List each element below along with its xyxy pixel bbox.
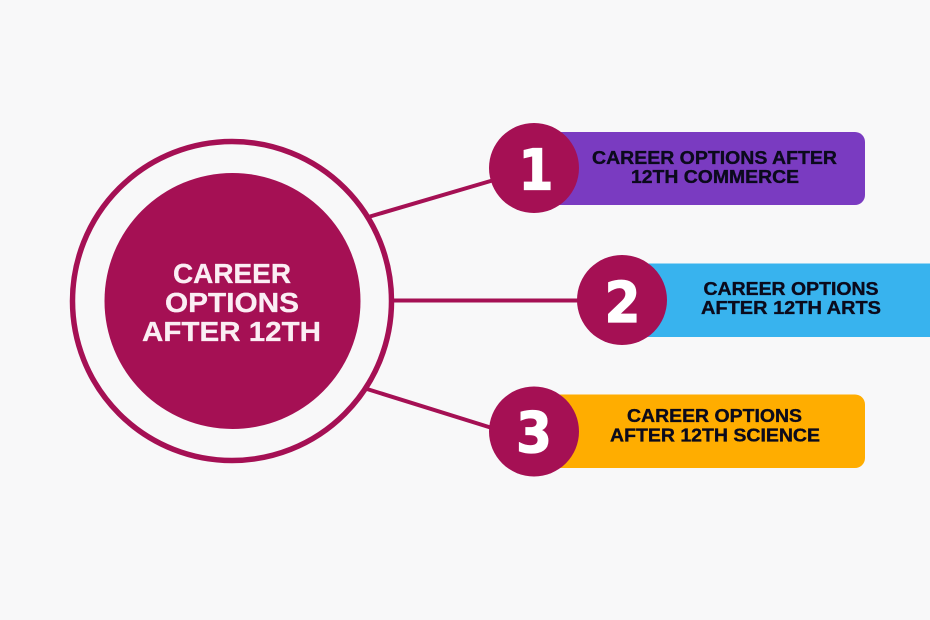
number badge 2: 2 [604, 271, 640, 336]
bar label: AFTER 12TH ARTS [701, 298, 881, 318]
option 3: science [489, 386, 865, 476]
central hub: career options after 12th [72, 142, 392, 460]
option 1: commerce [489, 123, 865, 213]
blue bar [630, 264, 930, 337]
bar label: CAREER OPTIONS [704, 279, 878, 299]
hub title: OPTIONS [165, 287, 299, 318]
number badge 3 [489, 386, 579, 476]
bar label [610, 406, 820, 446]
bar label [592, 148, 837, 187]
outer ring [72, 142, 392, 460]
bar label [701, 279, 881, 318]
bar label: 12TH COMMERCE [631, 167, 799, 187]
hub title: AFTER 12TH [142, 316, 321, 347]
connector lines [367, 180, 580, 428]
purple bar [540, 132, 865, 205]
number badge 1: 1 [518, 138, 554, 204]
amber bar [540, 394, 865, 468]
number badge 1 [489, 123, 579, 213]
number badge 3: 3 [516, 401, 552, 466]
number badge 2 [577, 255, 667, 345]
hub title [142, 258, 321, 347]
bar label: CAREER OPTIONS AFTER [592, 148, 837, 168]
bar label: CAREER OPTIONS [627, 406, 802, 426]
bar label: AFTER 12TH SCIENCE [610, 426, 820, 446]
hub title: CAREER [173, 258, 291, 289]
option 2: arts [577, 255, 930, 345]
inner filled circle [104, 173, 360, 429]
